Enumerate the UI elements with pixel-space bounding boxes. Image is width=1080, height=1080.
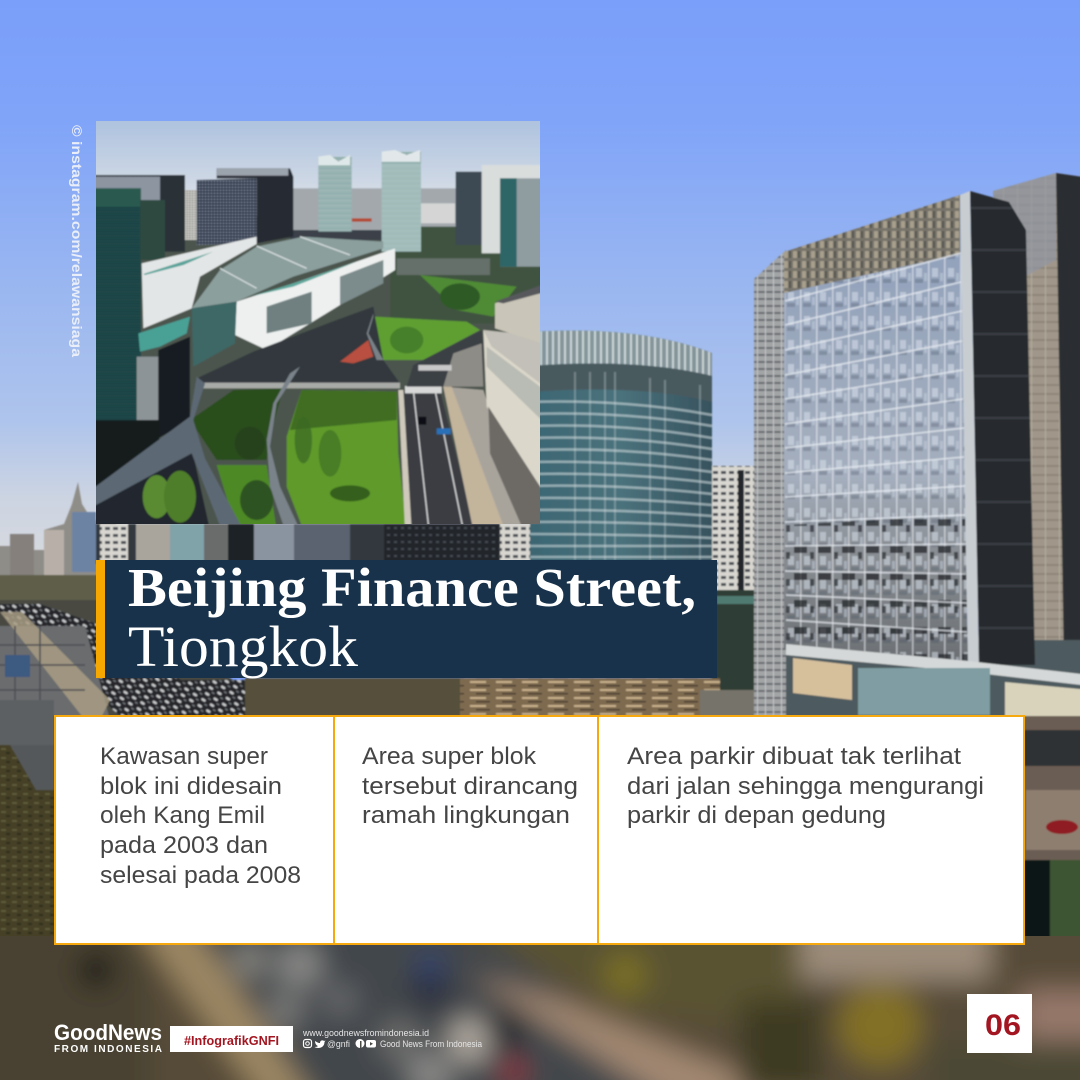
column 1 text bbox=[100, 743, 301, 889]
background: middle city strip bbox=[96, 524, 536, 564]
right buildings bbox=[482, 330, 540, 488]
column 3 text: dari jalan sehingga mengurangi bbox=[627, 773, 984, 800]
distant city bbox=[290, 188, 457, 230]
page number bbox=[967, 994, 1032, 1053]
photo credit: © instagram.com/relawansiaga bbox=[69, 125, 84, 358]
icon: twitter bbox=[314, 1040, 326, 1048]
hashtag tag bbox=[170, 1026, 293, 1052]
column 3 text bbox=[627, 743, 984, 829]
background: small white building between towers bbox=[712, 466, 757, 690]
column 1 text: blok ini didesain bbox=[100, 773, 282, 800]
background: highway with traffic bbox=[0, 600, 300, 720]
background: city photo bbox=[0, 173, 1080, 941]
white front block bbox=[235, 248, 395, 350]
background: right beige tower bbox=[993, 173, 1080, 720]
social links: Good News From Indonesia bbox=[380, 1039, 483, 1050]
icon: youtube bbox=[366, 1040, 376, 1048]
background: curved glass tower bbox=[530, 331, 712, 565]
logo: GoodNews from Indonesia bbox=[54, 1020, 162, 1055]
dark corner and path bbox=[96, 454, 209, 524]
photo: Beijing super block aerial view bbox=[86, 111, 550, 534]
background: sky bbox=[0, 0, 1080, 600]
column 1 text: selesai pada 2008 bbox=[100, 862, 301, 889]
column 2 text: Area super blok bbox=[362, 743, 537, 770]
page number: 06 bbox=[985, 1009, 1021, 1042]
twin towers bbox=[318, 157, 352, 232]
glass lower bbox=[192, 302, 237, 367]
background: distant left skyline bbox=[0, 482, 116, 605]
social links: @gnfi bbox=[327, 1039, 350, 1050]
trees bbox=[143, 475, 171, 518]
title banner bbox=[96, 557, 717, 679]
panel: three description columns bbox=[55, 716, 1024, 944]
roof bbox=[192, 237, 383, 308]
column 3 text: Area parkir dibuat tak terlihat bbox=[627, 743, 961, 770]
social links: www.goodnewsfromindonesia.id bbox=[302, 1028, 429, 1039]
icon: facebook bbox=[356, 1039, 364, 1048]
right trees ground bbox=[390, 227, 547, 323]
column 1 text: Kawasan super bbox=[100, 743, 268, 770]
heading: Beijing Finance Street, bbox=[128, 557, 696, 618]
background: side trees bbox=[0, 700, 1080, 941]
convention centre wing bbox=[142, 237, 257, 328]
subheading: Tiongkok bbox=[128, 614, 358, 679]
background: blurred lower strip bbox=[0, 936, 1080, 1080]
icon: instagram bbox=[304, 1040, 312, 1048]
column 2 text bbox=[362, 743, 578, 829]
social links bbox=[302, 1028, 483, 1050]
hashtag tag: #InfografikGNFI bbox=[184, 1034, 279, 1048]
background: main glass tower bbox=[754, 191, 1080, 730]
bridge bbox=[197, 383, 400, 388]
left teal tower bbox=[96, 207, 142, 421]
left back buildings bbox=[90, 175, 185, 252]
right towers bbox=[456, 172, 482, 245]
logo: GoodNews from Indonesia: GoodNews bbox=[54, 1020, 162, 1045]
column 1 text: pada 2003 dan bbox=[100, 832, 268, 859]
pavement bbox=[452, 386, 522, 524]
background: road and garden strip bbox=[245, 678, 754, 720]
column 3 text: parkir di depan gedung bbox=[627, 802, 886, 829]
column 1 text: oleh Kang Emil bbox=[100, 802, 265, 829]
main road bbox=[404, 392, 472, 524]
column 2 text: ramah lingkungan bbox=[362, 802, 570, 829]
column 2 text: tersebut dirancang bbox=[362, 773, 578, 800]
logo: GoodNews from Indonesia: FROM INDONESIA bbox=[54, 1044, 162, 1055]
lower left volumes bbox=[138, 317, 190, 352]
plaza bbox=[197, 307, 400, 383]
lawns bbox=[190, 388, 283, 460]
